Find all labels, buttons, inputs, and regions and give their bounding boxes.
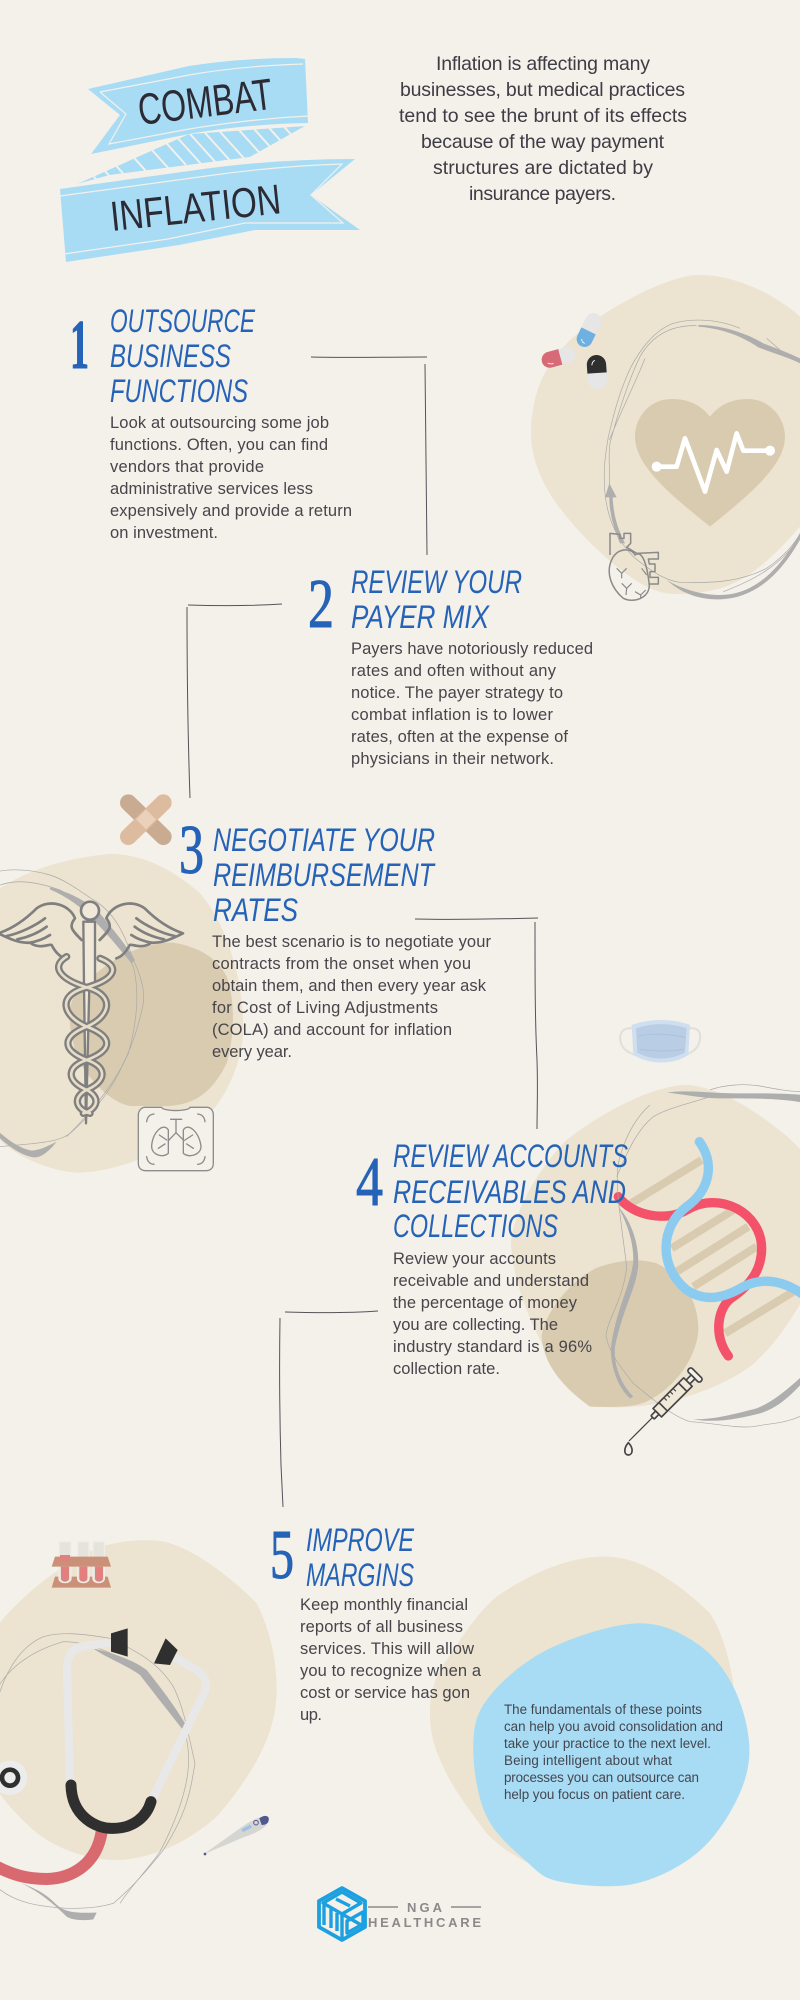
intro paragraph: Inflation is affecting many [436,53,650,75]
icon: dna helix [618,1142,800,1356]
body 3 [212,933,492,1061]
intro paragraph: tend to see the brunt of its effects [399,105,687,127]
pulse line [652,433,775,492]
body 5: cost or service has gon [300,1684,470,1702]
heading 5 [306,1522,414,1593]
pill: blue [574,310,604,350]
title banner [60,58,360,262]
body 4: the percentage of money [393,1294,578,1312]
body 1: administrative services less [110,480,313,498]
illustration: dna cluster [511,1020,800,1455]
body 4 [393,1250,592,1378]
icon: bandage [128,803,163,837]
blob dark [70,943,233,1106]
body 1 [110,414,352,542]
blob [0,1540,277,1860]
intro paragraph [399,53,687,205]
heading 2: PAYER MIX [351,599,490,635]
heading 3: NEGOTIATE YOUR [213,822,435,858]
logo text HEALTHCARE: HEALTHCARE [368,1915,481,1930]
scribble circle [0,870,144,1157]
logo lines [368,1906,481,1908]
icon: syringe [623,1367,703,1447]
intro paragraph: businesses, but medical practices [400,79,685,101]
scribble circle [606,1085,800,1427]
body 3: (COLA) and account for inflation [212,1021,452,1039]
body 2: Payers have notoriously reduced [351,640,593,658]
body 2: combat inflation is to lower [351,706,554,724]
pill: red [540,345,577,370]
body 5: services. This will allow [300,1640,474,1658]
connector 4 [280,1311,378,1507]
step 4 [356,1138,628,1378]
body 2: rates, often at the expense of [351,728,568,746]
heading 1 [110,303,255,409]
icon: drop [625,1443,632,1455]
heading 1: BUSINESS [110,338,231,374]
body 5: reports of all business [300,1618,463,1636]
body 4: industry standard is a 96% [393,1338,592,1356]
conclusion text: The fundamentals of these points [504,1702,702,1717]
body 2: physicians in their network. [351,750,554,768]
logo [319,1888,481,1940]
body 2 [351,640,593,768]
blob light [511,1085,800,1407]
heading 1: OUTSOURCE [110,303,255,339]
blob [531,275,800,594]
pill: black [586,354,608,390]
banner: inflation: INFLATION [108,175,283,240]
body 3: The best scenario is to negotiate your [212,933,492,951]
icon: lungs x-ray [138,1107,213,1171]
body 5: up. [300,1706,322,1724]
number 1: 1 [70,307,89,384]
illustration: caduceus cluster [0,803,243,1173]
body 2: notice. The payer strategy to [351,684,563,702]
body 3: contracts from the onset when you [212,955,471,973]
heart [635,399,785,527]
connector 2 [187,604,282,798]
intro paragraph: insurance payers. [469,183,616,205]
heading 2: REVIEW YOUR [351,564,522,600]
conclusion text: take your practice to the next level. [504,1736,711,1751]
wing left [0,904,82,958]
blob dark [542,1260,698,1407]
heading 3: REIMBURSEMENT [213,857,436,893]
illustration: heart cluster [531,275,800,600]
wing right [100,904,183,958]
body 5 [300,1596,482,1724]
blob tan [430,1557,733,1870]
heading 5: MARGINS [306,1557,414,1593]
number 5: 5 [270,1517,294,1594]
intro paragraph: because of the way payment [421,131,665,153]
conclusion text [504,1702,723,1802]
body 1: expensively and provide a return [110,502,352,520]
heading 3 [213,822,436,928]
banner: combat [88,58,308,154]
step 2 [308,564,593,768]
conclusion text: help you focus on patient care. [504,1787,685,1802]
body 1: functions. Often, you can find [110,436,328,454]
number 2: 2 [308,566,334,643]
heading 3: RATES [213,892,298,928]
banner: inflation [60,159,360,262]
body 5: Keep monthly financial [300,1596,468,1614]
icon: thermometer [203,1816,269,1855]
connector 3 [415,918,538,1129]
heading 2 [351,564,522,635]
logo mark [319,1888,365,1940]
heading 4: REVIEW ACCOUNTS [393,1138,628,1174]
step 1 [70,303,352,542]
staff [83,922,95,1123]
icon: anatomical heart [609,533,658,600]
icon: test tubes [52,1542,111,1588]
number 4: 4 [356,1144,383,1221]
intro paragraph: structures are dictated by [433,157,653,179]
icon: face mask [620,1020,700,1062]
conclusion text: processes you can outsource can [504,1770,699,1785]
body 3: obtain them, and then every year ask [212,977,487,995]
banner stripes [78,126,304,184]
body 3: for Cost of Living Adjustments [212,999,438,1017]
body 5: you to recognize when a [300,1662,482,1680]
body 2: rates and often without any [351,662,557,680]
illustration: stethoscope cluster [0,1540,277,1920]
conclusion text: Being intelligent about what [504,1753,672,1768]
scribble circle [604,320,800,599]
snakes [59,957,113,1113]
ball [81,902,99,920]
body 4: receivable and understand [393,1272,589,1290]
panel: conclusion [430,1557,749,1886]
icon: stethoscope [0,1628,206,1879]
blob blue [473,1623,749,1886]
blob light [0,854,243,1173]
body 4: collection rate. [393,1360,500,1378]
banner: combat: COMBAT [135,70,275,135]
step 5 [270,1517,414,1594]
body 4: Review your accounts [393,1250,556,1268]
scribble circle [0,1634,195,1920]
heading 4: RECEIVABLES AND [393,1174,626,1210]
connector 1 [311,357,427,555]
conclusion text: can help you avoid consolidation and [504,1719,723,1734]
body 4: you are collecting. The [393,1316,558,1334]
icon: caduceus [0,902,183,1123]
step 3 [179,812,492,1061]
body 3: every year. [212,1043,292,1061]
heading 1: FUNCTIONS [110,373,248,409]
logo text NGA: NGA [407,1900,443,1915]
body 1: vendors that provide [110,458,264,476]
heading 4 [393,1138,628,1244]
body 1: on investment. [110,524,218,542]
body 1: Look at outsourcing some job [110,414,329,432]
heading 4: COLLECTIONS [393,1208,558,1244]
number 3: 3 [179,812,204,889]
heading 5: IMPROVE [306,1522,414,1558]
